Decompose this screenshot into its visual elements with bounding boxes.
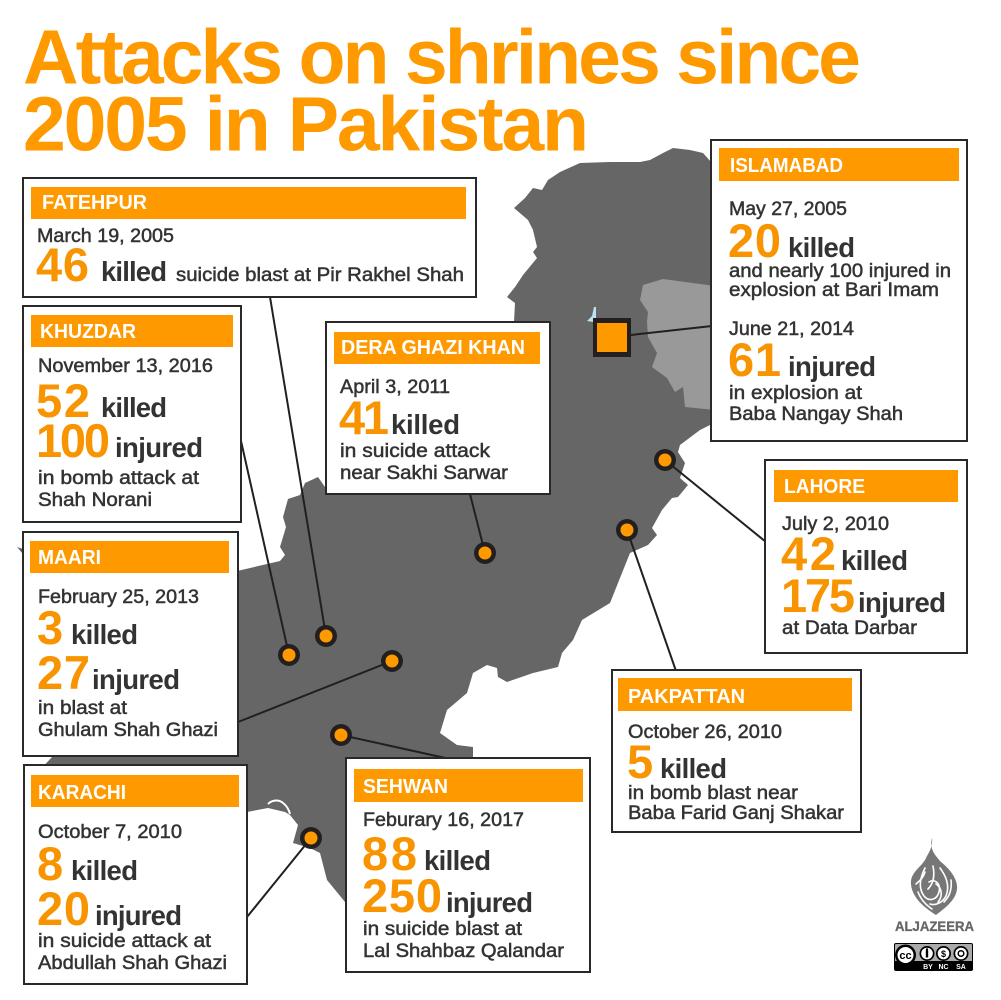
marker: Maari [381,650,403,672]
stat: 175 injured: injured [858,587,946,618]
description [628,782,845,824]
stat: 42 killed [781,527,908,580]
license badge: CC BY-NC-SA: cc [899,950,912,962]
description [38,697,218,741]
connector: Khuzdar [239,432,289,655]
stat: 27 injured [37,646,180,699]
stat: 88 killed: 88 [362,827,417,880]
stat: 20 killed: 20 [728,214,781,267]
region: Islamabad Capital Territory and Kashmir shading [640,279,715,410]
stat: 42 killed: 42 [781,527,836,580]
connector: Maari [238,661,392,722]
stat: 20 killed: killed [788,232,855,263]
description: Bari Imam [729,260,951,301]
stat: 8 killed: 8 [37,837,63,890]
license badge: CC BY-NC-SA [894,944,972,971]
map of Pakistan [17,148,760,915]
stat: 250 injured: 250 [362,869,442,922]
stat: 61 injured: 61 [728,333,781,386]
description: Baba Nangay Shah [729,382,903,425]
panel: Dera Ghazi Khan [326,322,550,494]
description [363,918,565,962]
connector: Karachi [247,838,311,917]
panel: Islamabad [711,140,967,441]
stat: 100 injured: 100 [36,414,110,467]
stat: 3 killed [37,601,138,654]
description: in suicide attack [340,440,490,462]
date: April 3, 2011 [340,376,450,398]
description: near Sakhi Sarwar [340,462,509,484]
description: at Data Darbar [782,617,918,639]
stat: 52 killed: killed [101,392,167,423]
heading: Fatehpur: FATEHPUR [42,192,148,214]
license badge: CC BY-NC-SA: BY [923,964,933,971]
connector: Pakpattan [627,530,676,671]
description: in bomb blast near [628,782,799,804]
description: Ghulam Shah Ghazi [38,719,218,741]
stat: 61 injured: injured [788,351,876,382]
date: Feburary 16, 2017 [363,809,524,831]
description: in bomb attack at [38,467,200,489]
marker: Khuzdar [278,644,300,666]
panel: Sehwan [346,758,590,972]
stat: 20 injured: injured [95,900,182,931]
date: October 26, 2010 [628,721,782,743]
connector: Islamabad [631,326,712,335]
stat: 46 killed [36,238,167,291]
date: October 7, 2010 [38,821,182,843]
icon: calligraphic emblem [911,838,957,915]
stat: 41 killed [339,391,460,444]
stat: 46 killed: killed [101,256,167,287]
stat: 250 injured: injured [446,887,533,918]
description: suicide blast at Pir Rakhel Shah [176,264,464,286]
description: Shah Norani [38,489,152,511]
date: June 21, 2014: June 21, 2014 [729,318,854,340]
stat: 5 killed [627,735,727,788]
description [38,467,200,511]
stat: 27 injured: 27 [37,646,90,699]
date: May 27, 2005: May 27, 2005 [729,198,847,220]
heading: Maari: MAARI [38,547,101,569]
description: Lal Shahbaz Qalandar [363,940,565,962]
date: March 19, 2005 [37,225,174,247]
stat: 8 killed: killed [71,855,138,886]
panel: Fatehpur [23,178,476,297]
stat: 52 killed: 52 [36,374,90,427]
wordmark: ALJAZEERA [895,919,974,934]
description: in suicide attack at [38,930,212,952]
description [340,440,509,484]
stat: 5 killed: 5 [627,735,653,788]
stat: 61 injured [728,333,876,386]
stat: 52 killed [36,374,167,427]
stat: 8 killed [37,837,138,890]
heading: Khuzdar: KHUZDAR [40,321,137,343]
marker: Karachi [300,827,322,849]
stat: 3 killed: killed [71,619,138,650]
description: Baba Farid Ganj Shakar [628,802,845,824]
heading: Dera Ghazi Khan: DERA GHAZI KHAN [341,337,525,359]
connector: Dera Ghazi Khan [470,494,485,553]
description: Baba Nangay Shah: in explosion at [729,382,863,404]
stat: 100 injured: injured [115,432,203,463]
stat: 175 injured: 175 [781,569,855,622]
date: November 13, 2016 [38,355,213,377]
stat: 3 killed: 3 [37,601,63,654]
description: Baba Nangay Shah: Baba Nangay Shah [729,403,903,425]
stat: 20 killed [728,214,855,267]
heading: Sehwan: SEHWAN [363,776,448,798]
marker: Islamabad square [593,318,631,357]
stat: 20 injured: 20 [37,882,90,935]
stat: 46 killed: 46 [36,238,89,291]
license badge: CC BY-NC-SA: $ [941,949,946,959]
stat: 100 injured [36,414,203,467]
license badge: CC BY-NC-SA: NC [938,964,949,971]
connector: Fatehpur [270,297,326,636]
description [38,930,227,974]
heading: Islamabad: ISLAMABAD [730,155,843,177]
heading: Pakpattan: PAKPATTAN [628,686,745,708]
stat: 41 killed: 41 [339,391,389,444]
stat: 88 killed [362,827,491,880]
connector: Lahore [665,460,766,542]
marker: Fatehpur [315,625,337,647]
stat: 175 injured [781,569,946,622]
marker: Pakpattan [616,519,638,541]
marker: Sehwan [330,724,352,746]
stat: 88 killed: killed [424,845,491,876]
panel: Pakpattan [612,670,861,832]
description: Bari Imam: and nearly 100 injured in [729,260,951,282]
stat: 41 killed: killed [391,409,460,440]
coastline inlet detail [268,800,290,814]
stat: 250 injured [362,869,533,922]
western border tick [17,547,23,554]
description: in suicide blast at [363,918,523,940]
panel: Lahore [765,460,967,653]
marker: Lahore [654,449,676,471]
connector: Sehwan [341,735,450,759]
stat: 5 killed: killed [660,753,727,784]
title: Attacks on shrines since [23,14,861,100]
panel: Khuzdar [23,306,241,522]
stat: 27 injured: injured [92,664,180,695]
license badge: CC BY-NC-SA: SA [956,964,966,971]
heading: Karachi: KARACHI [38,782,126,804]
icon: Rawal lake [587,307,596,322]
stat: 20 injured [37,882,182,935]
logo: Al Jazeera [895,838,974,934]
date: July 2, 2010 [782,513,889,535]
marker: Dera Ghazi Khan [474,542,496,564]
panel: Maari [23,532,238,756]
title: 2005 in Pakistan [23,82,589,168]
description: in blast at [38,697,128,719]
date: February 25, 2013 [38,586,199,608]
panel: Karachi [24,765,247,984]
heading: Lahore: LAHORE [784,476,865,498]
description: Bari Imam: explosion at Bari Imam [729,279,939,301]
stat: 42 killed: killed [841,545,908,576]
title [23,14,861,168]
description: Abdullah Shah Ghazi [38,952,227,974]
